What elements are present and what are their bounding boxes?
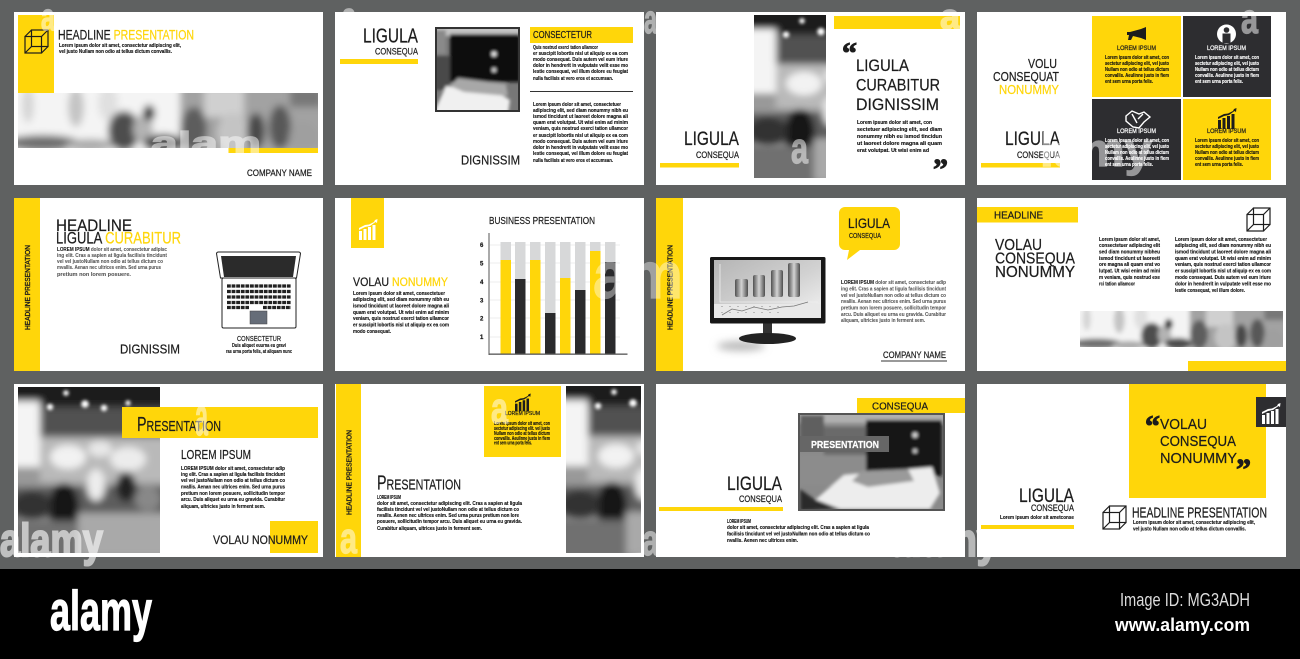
heading: VOLU <box>1028 56 1057 71</box>
tile: yellow chart: Nullam non odio at tellus dictum <box>1195 150 1259 156</box>
paragraph two: dolor in hendrerit in vulputate velit esse mo <box>533 145 628 151</box>
paragraph: Curabitur aliquam, ultrices justo in ferment sem. <box>377 526 482 532</box>
title <box>684 129 740 161</box>
stock watermarks: am <box>593 238 683 312</box>
tile: yellow megaphone: LOREM IPSUM <box>1117 46 1156 52</box>
tile: yellow megaphone: sectetur adipiscing elit, vel justo <box>1105 61 1169 67</box>
yellow quote panel <box>1129 384 1266 498</box>
heading: PRESENTATION <box>377 472 461 494</box>
stock watermarks: a <box>791 124 808 173</box>
photo strip <box>18 93 318 148</box>
slide 5: laptop slide <box>14 198 323 371</box>
slide 1: headline presentation cover <box>5 12 330 185</box>
grey paragraph: LOREM IPSUM dolor sit amet, consectetur adip <box>841 280 946 286</box>
paragraph: aliquam, ultricies justo in ferment sem. <box>181 504 265 510</box>
bar chart: 2 <box>480 316 484 322</box>
grey paragraph: nvallis. Aenan nec ultrices enim. Sed urna purus <box>841 299 946 305</box>
yellow corner block <box>18 15 54 93</box>
yellow info tile: LOREM IPSUM <box>505 411 540 417</box>
bar chart: 4 <box>480 280 484 286</box>
paragraph two: ismod tincidunt ut laoreet dolore magna ali <box>533 114 628 120</box>
quote heading: DIGNISSIM <box>856 95 939 114</box>
paragraph: LOREM IPSUM <box>377 495 401 501</box>
title: LIGULA <box>363 26 418 48</box>
vertical headline: HEADLINE PRESENTATION <box>25 245 32 330</box>
paragraph: LOREM IPSUM dolor sit amet, consectetur adip <box>181 466 285 472</box>
intro text <box>59 43 181 55</box>
title: CONSEQUA <box>739 494 783 505</box>
quote text: sectetuer adipiscing elit, sed diam <box>857 127 942 133</box>
intro text: vel justo Nullam non odio at tellus dictum convallis. <box>59 49 172 55</box>
paragraph two: modo consequat. Duis autem vel eum iriure <box>1175 275 1271 281</box>
yellow tab: CONSEQUA <box>872 400 928 412</box>
tile: yellow megaphone <box>1092 16 1181 97</box>
stock watermarks: a <box>195 387 208 447</box>
yellow bar <box>981 163 1060 168</box>
yellow bar <box>659 507 783 511</box>
paragraph two: adipiscing elit, sed diam nonummy nibh eu <box>1175 243 1271 249</box>
stock watermarks: lamy <box>1040 124 1152 176</box>
tile: yellow megaphone: ent sem urna porta felis. <box>1105 79 1154 85</box>
yellow side band <box>14 198 40 371</box>
tile: dark person: LOREM IPSUM <box>1207 46 1246 52</box>
bar chart: 3 <box>480 298 484 304</box>
slide 10: presentation side band <box>335 384 644 557</box>
title: LIGULA <box>727 474 782 495</box>
heading <box>993 56 1059 97</box>
yellow bar <box>340 59 418 64</box>
chart title: BUSINESS PRESENTATION <box>489 216 595 227</box>
paragraph: dolor sit amet, consectetur adipiscing elit. Cras a sapien at ligula <box>727 525 869 531</box>
bar chart: 6 <box>480 243 484 249</box>
tile: dark person <box>1183 16 1271 97</box>
yellow info tile: convallis. Aeulinne justo in fiem <box>494 436 550 442</box>
yellow info tile <box>484 386 561 457</box>
bar chart <box>480 233 628 355</box>
paragraph: dolor sit amet, consectetur adipiscing elit. Cras a sapien at ligula <box>377 501 522 507</box>
caption: Duis aliquet euurna eu gravi <box>232 343 286 349</box>
heading <box>995 237 1076 281</box>
tile: dark person: Nullam non odio at tellus dictum <box>1195 67 1259 73</box>
yellow tab <box>857 398 965 413</box>
title <box>1005 129 1061 161</box>
paragraph one: Lorem ipsum dolor sit amet, <box>1099 237 1160 243</box>
quote heading <box>856 56 940 114</box>
yellow bar <box>660 163 739 168</box>
paragraph one: consectetuer adipiscing elit <box>1099 243 1160 249</box>
icon: growth chart <box>515 393 531 411</box>
heading: LIGULA CURABITUR <box>56 228 181 248</box>
photo label <box>800 436 889 452</box>
tile: yellow chart: Lorem ipsum dolor sit amet, con <box>1195 138 1259 144</box>
subheading: LOREM IPSUM <box>181 447 251 462</box>
quote text: NONUMMY <box>1160 451 1237 467</box>
paragraph two: quam erat volutpat. Ut wisi enim ad minim <box>533 120 628 126</box>
paragraph: facilisis tincidunt vel vel justoNullam non odio at tellus dictum co <box>377 507 519 513</box>
company name: COMPANY NAME <box>883 350 946 361</box>
grey paragraph: vel vel justoNullam non odio at tellus dictum co <box>57 259 163 265</box>
bar chart: 5 <box>480 262 484 268</box>
tile: dark handshake: LOREM IPSUM <box>1117 129 1156 135</box>
quote text <box>857 120 942 154</box>
paragraph two: quam erat volutpat. Ut wisi enim ad minim <box>1175 256 1271 262</box>
speech bubble: CONSEQUA <box>849 233 881 240</box>
tile: yellow chart: ent sem urna porta felis. <box>1195 162 1244 168</box>
paragraph two: nulla facilisis at vero eros et accumsan. <box>533 158 613 164</box>
paragraph two: ismod tincidunt ut laoreet dolore magna ali <box>1175 250 1271 256</box>
grey paragraph: vel vel justoNullam non odio at tellus dictum co <box>841 293 946 299</box>
photo label: PRESENTATION <box>811 439 879 451</box>
speech bubble <box>839 207 900 260</box>
tile: dark person: Lorem ipsum dolor sit amet, con <box>1195 55 1259 61</box>
footer bar <box>0 569 1300 659</box>
quote text: ut laoreet dolore magna ali quam <box>857 141 942 147</box>
paragraph two: er suscipit lobortis nisl ut aliquip ex ea com <box>1175 268 1271 274</box>
stock watermarks: a <box>491 384 508 433</box>
description: vel justo Nullam non odio at tellus dictum convallis. <box>1133 526 1246 532</box>
paragraph two: Lorem ipsum dolor sit amet, consectetuer <box>1175 237 1267 243</box>
icon: person in circle <box>1217 24 1236 44</box>
paragraph: ismod tincidunt ut laoreet dolore magna ali <box>353 304 449 310</box>
cafe photo <box>754 15 826 178</box>
stock watermarks: alam <box>151 125 261 160</box>
stock watermarks: alamy <box>0 514 103 566</box>
paragraph two: lestie consequat, vel illum dolore. <box>1175 288 1245 294</box>
slide 9: presentation with large photo <box>8 377 323 561</box>
grey paragraph: mvallis. Aenan nec ultrices enim. Sed urna purus <box>57 265 161 271</box>
paragraph: veniam, quis nostrud exerci tation ullamcor <box>353 316 449 322</box>
tile: yellow chart <box>1183 99 1271 180</box>
dignissim label: DIGNISSIM <box>120 342 180 356</box>
yellow side band <box>336 384 361 557</box>
heading band: CONSECTETUR <box>533 30 592 41</box>
slide 7: monitor slide <box>656 198 965 371</box>
paragraph two: dolor in hendrerit in vulputate velit esse mo <box>1175 282 1271 288</box>
tile: dark handshake: convallis. Aeulinne justo in fiem <box>1105 156 1169 162</box>
headline tab <box>977 207 1078 222</box>
dignissim label: DIGNISSIM <box>461 152 520 168</box>
paragraph <box>377 495 522 532</box>
quote heading: CURABITUR <box>856 76 940 94</box>
title <box>363 26 419 58</box>
paragraph: posuere, sollicitudin tempor arcu. Duis aliquet eu urna eu gravida. <box>377 519 522 525</box>
paragraph one <box>533 45 628 82</box>
bar chart: 1 <box>480 335 484 341</box>
paragraph two: veniam, quis nostrud exerci tation ullamcor <box>1175 262 1271 268</box>
yellow title band: PRESENTATION <box>137 414 221 436</box>
icon: handshake <box>1126 111 1150 128</box>
paragraph <box>353 291 449 335</box>
paragraph: vel vel justoNullam non odio at tellus dictum co <box>181 478 285 484</box>
yellow info tile: Lorem ipsum dolor sit amet, con <box>494 421 550 427</box>
heading band <box>530 27 633 43</box>
opening quote: “ <box>1145 410 1160 443</box>
icon: growth chart <box>1218 108 1236 129</box>
slide 2: ligula consequa with photo <box>335 12 644 185</box>
grey paragraph: arcu. Duis aliquet eu urna eu gravida. Curabitur <box>841 312 946 318</box>
cafe photo <box>566 386 641 553</box>
paragraph one: m veniam, quis nostrud exe <box>1099 275 1160 281</box>
caption: VOLAU NONUMMY <box>213 533 308 547</box>
paragraph two: modo consequat. Duis autem vel eum iriure <box>533 139 628 145</box>
heading: CONSEQUA <box>995 250 1076 268</box>
paragraph one: rci tation ullamcor <box>1099 282 1135 288</box>
icon: wireframe cube <box>1103 506 1126 529</box>
tile: dark handshake: Lorem ipsum dolor sit amet, con <box>1105 138 1169 144</box>
yellow stripe <box>228 148 318 153</box>
paragraph one: ismod tincidunt ut laoreeti <box>1099 256 1161 262</box>
grey paragraph: LOREM IPSUM dolor sit amet, consectetur adipisc <box>57 247 167 253</box>
tile: dark handshake <box>1092 99 1181 180</box>
paragraph two: adipiscing elit, sed diam nonummy nibh eu <box>533 108 628 114</box>
tile: dark handshake: Nullam non odio at tellus dictum <box>1105 150 1169 156</box>
slide 8: volau consequa nonummy <box>977 198 1291 371</box>
yellow top band <box>834 16 960 29</box>
paragraph: er suscipit lobortis nisl ut aliquip ex ea com <box>353 322 449 328</box>
paragraph one: lestie consequat, vel illum dolore eu feugiat <box>533 69 628 75</box>
opening quote: “ <box>842 37 857 70</box>
yellow corner <box>270 521 318 553</box>
tile: yellow megaphone: convallis. Aeulinne justo in fiem <box>1105 73 1169 79</box>
stock watermarks: a <box>340 514 357 563</box>
paragraph: ing elit. Cras a sapien at ligula facilisis tincidunt <box>181 472 285 478</box>
grey paragraph <box>841 280 946 324</box>
tile: yellow chart: convallis. Aeulinne justo in fiem <box>1195 156 1259 162</box>
title: CONSEQUA <box>375 46 419 58</box>
paragraph: adipiscing elit, sed diam nonummy nibh eu <box>353 297 449 303</box>
paragraph one: er suscipit lobortis nisl ut aliquip ex ea com <box>533 51 628 57</box>
paragraph <box>181 466 285 510</box>
vertical headline: HEADLINE PRESENTATION <box>668 245 674 330</box>
paragraph one: ore magna ali quam erat vo <box>1099 262 1160 268</box>
paragraph: modo consequat. <box>353 329 391 335</box>
paragraph one: modo consequat. Duis autem vel eum iriure <box>533 57 628 63</box>
heading: VOLAU <box>995 237 1042 254</box>
tile: yellow chart: LOREM IPSUM <box>1207 129 1246 135</box>
yellow bar <box>981 525 1074 529</box>
slide 6: bar chart slide <box>335 198 644 371</box>
title: LIGULA <box>684 129 739 150</box>
intro text: Lorem ipsum dolor sit amet, consectetur adipiscing elit, <box>59 43 181 49</box>
tile: yellow megaphone: Lorem ipsum dolor sit amet, con <box>1105 55 1169 61</box>
title: LIGULA <box>1019 486 1074 507</box>
paragraph one: Quis nostrud exerci tation ullamcor <box>533 45 598 51</box>
icon: wireframe cube <box>1247 208 1270 231</box>
quote heading: LIGULA <box>856 56 910 75</box>
cafe photo <box>18 387 160 553</box>
title: LIGULA <box>1005 129 1060 150</box>
headline: HEADLINE PRESENTATION <box>58 26 194 42</box>
paragraph one: sed diam nonummy nibheu <box>1099 250 1160 256</box>
paragraph: LOREM IPSUM <box>727 519 751 525</box>
laptop photo <box>434 26 524 114</box>
yellow info tile: ent sem urna porta felis. <box>494 440 532 446</box>
tile: dark handshake: sectetur adipiscing elit, vel justo <box>1105 144 1169 150</box>
paragraph: nvallis. Aenen nec ultrices enim. <box>727 538 798 544</box>
grey paragraph <box>57 247 167 278</box>
grey paragraph: pretium non lorem posuere. <box>57 272 132 278</box>
paragraph two: veniam, quis nostrud exerci tation ullamcor <box>533 126 628 132</box>
paragraph: pretium non lorem posuere, sollicitudin tempor <box>181 491 285 497</box>
stock watermarks: a <box>642 516 659 565</box>
icon: growth chart <box>359 219 378 240</box>
quote text: VOLAU <box>1160 417 1207 433</box>
alamy logo: alamy <box>50 579 152 642</box>
quote text: nonummy nibh eu ismod tincidun <box>857 134 942 140</box>
laptop photo <box>796 411 947 511</box>
tile: yellow chart: sectetur adipiscing elit, vel justo <box>1195 144 1259 150</box>
tile: dark person: convallis. Aeulinne justo in fiem <box>1195 73 1259 79</box>
headline tab: HEADLINE <box>994 210 1043 222</box>
yellow tab with icon <box>351 198 384 248</box>
paragraph: quam erat volutpat. Ut wisi enim ad minim <box>353 310 449 316</box>
paragraph two: Lorem ipsum dolor sit amet, consectetuer <box>533 102 621 108</box>
paragraph two <box>1175 237 1271 294</box>
yellow title band <box>122 407 318 438</box>
paragraph two <box>533 102 628 164</box>
heading <box>56 216 181 248</box>
vertical headline: HEADLINE PRESENTATION <box>346 430 354 515</box>
heading: CONSEQUAT <box>993 69 1059 84</box>
paragraph two: lestie consequat, vel illum dolore eu feugiat <box>533 151 628 157</box>
quote text: Lorem ipsum dolor sit amet, con <box>857 120 932 126</box>
small caption: Lorem ipsum dolor sit ametconse <box>1000 515 1074 521</box>
paragraph one: lutpat. Ut wisi enim ad mini <box>1099 268 1161 274</box>
icon: growth chart <box>1262 403 1280 424</box>
yellow side band <box>656 198 683 371</box>
icon: wireframe cube <box>25 30 48 53</box>
grey paragraph: aliquam, ultricies justo in ferment sem. <box>841 318 925 324</box>
heading: NONUMMY <box>995 264 1075 281</box>
monitor with chart <box>710 257 826 351</box>
closing quote: ” <box>933 153 948 186</box>
grey paragraph: pretium non lorem posuere, sollicitudin tempor <box>841 306 946 312</box>
slide 4: four tile grid <box>977 12 1286 185</box>
paragraph: nvallis. Aenan nec ultrices enim. Sed urna purus <box>181 484 285 490</box>
caption <box>226 334 292 355</box>
image id: Image ID: MG3ADH <box>1120 590 1250 610</box>
title <box>1019 486 1075 514</box>
quote text <box>1160 417 1237 467</box>
yellow corner <box>1188 361 1286 371</box>
heading: VOLAU NONUMMY <box>353 277 448 289</box>
tile: yellow megaphone: Nullam non odio at tellus dictum <box>1105 67 1169 73</box>
stock watermarks: alamy <box>890 514 998 566</box>
dark icon tile <box>1256 397 1286 427</box>
grey paragraph: ing elit. Cras a sapien at ligula facilisis tincidunt <box>57 253 167 259</box>
title: CONSEQUA <box>1031 503 1075 514</box>
quote text: erat volutpat. Ut wisi enim ad <box>857 148 929 154</box>
yellow info tile: Nullam non odio at tellus dictum <box>494 431 550 437</box>
closing quote: ” <box>1236 453 1251 486</box>
paragraph one: dolor in hendrerit in vulputate velit esse mo <box>533 63 628 69</box>
paragraph: arcu. Duis aliquet eu urna eu gravida. Curabitur <box>181 497 285 503</box>
title: CONSEQUA <box>696 150 740 161</box>
description: Lorem ipsum dolor sit amet, consectetur adipiscing elit, <box>1133 520 1255 526</box>
caption: ras urna porta felis, at aliquam nunc <box>226 349 292 355</box>
slide 3: quote slide <box>656 5 965 186</box>
paragraph one <box>1099 237 1161 288</box>
title: CONSEQUA <box>1017 150 1061 161</box>
website: www.alamy.com <box>1114 615 1250 635</box>
quote text: CONSEQUA <box>1160 434 1236 450</box>
tile: dark person: ent sem urna porta felis. <box>1195 79 1244 85</box>
paragraph: Lorem ipsum dolor sit amet, consectetuer <box>353 291 445 297</box>
photo strip <box>1080 311 1283 347</box>
paragraph one: nulla facilisis at vero eros et accumsan. <box>533 76 613 82</box>
heading: HEADLINE <box>56 216 132 235</box>
slide 12: yellow quote slide <box>977 384 1286 557</box>
description <box>1133 520 1255 532</box>
grey paragraph: ing elit. Cras a sapien at ligula facilisis tincidunt <box>841 286 946 292</box>
paragraph: nvallis. Aenen nec ultrices enim. Sed urna purus pretium non lore <box>377 513 519 519</box>
paragraph: facilisis tincidunt vel vel justoNullam non odio at tellus dictum co <box>727 532 870 538</box>
paragraph <box>727 519 870 544</box>
yellow info tile: sectetur adipiscing elit. vel justo <box>494 426 550 432</box>
slide 11: consequa with photo <box>656 384 965 557</box>
speech bubble: LIGULA <box>848 215 891 231</box>
title <box>727 474 783 505</box>
tile: dark handshake: ent sem urna porta felis. <box>1105 162 1154 168</box>
tile: dark person: sectetur adipiscing elit, vel justo <box>1195 61 1259 67</box>
icon: laptop <box>216 252 300 328</box>
icon: megaphone <box>1127 27 1146 40</box>
heading: NONUMMY <box>999 82 1059 97</box>
company name: COMPANY NAME <box>247 168 312 179</box>
caption: CONSECTETUR <box>237 334 281 343</box>
paragraph two: er suscipit lobortis nisl ut aliquip ex ea com <box>533 133 628 139</box>
